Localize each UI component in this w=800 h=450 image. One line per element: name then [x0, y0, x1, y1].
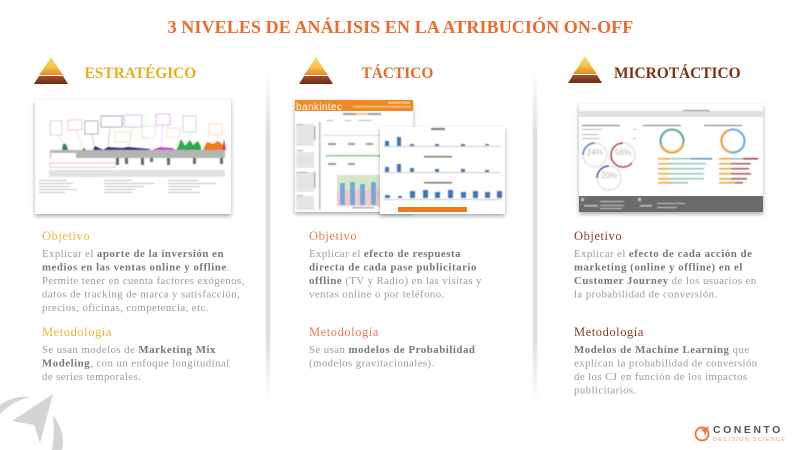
text: metodología microtáctico: Modelos de Machine Learning que — [574, 344, 750, 356]
logo: conento: CONENTO — [713, 424, 783, 436]
text: metodología microtáctico: explican la probabilidad de conversión — [574, 358, 758, 370]
text: objetivo estratégico: Permite tener en cuenta factores exógenos, — [42, 275, 245, 287]
heading: microtáctico: MICROTÁCTICO — [614, 65, 741, 82]
panel: microtáctico — [568, 56, 763, 396]
dashboard image: customer journey: 20% — [601, 171, 617, 180]
text: metodología táctico: Se usan modelos de Probabilidad — [309, 344, 475, 356]
text: metodología microtáctico — [574, 325, 758, 396]
text: metodología táctico: (modelos gravitacionales). — [309, 358, 435, 370]
logo: conento: DECISION SCIENCE — [713, 437, 786, 443]
text: metodología estratégico — [42, 325, 230, 383]
title: 3 NIVELES DE ANÁLISIS EN LA ATRIBUCIÓN ON-OFF — [168, 16, 633, 37]
text: objetivo estratégico: precios, oficinas, competencia, etc. — [42, 302, 209, 314]
text: objetivo táctico — [309, 229, 482, 300]
chart image: marketing mix timeline — [35, 100, 231, 214]
text: objetivo microtáctico: Objetivo — [574, 229, 622, 243]
text: metodología microtáctico: Metodología — [574, 325, 644, 339]
logo: conento — [696, 424, 786, 443]
text: metodología microtáctico: publicitarios. — [574, 384, 637, 396]
dashboard image: customer journey: 24% — [587, 148, 603, 157]
text: objetivo microtáctico: Customer Journey de los usuarios en — [574, 275, 757, 287]
text: objetivo táctico: Explicar el efecto de respuesta — [309, 248, 461, 260]
text: metodología microtáctico: de los CJ en función de los impactos — [574, 371, 748, 383]
icon: pyramid estratégico — [34, 57, 68, 84]
heading: táctico: TÁCTICO — [362, 65, 433, 82]
heading: estratégico: ESTRATÉGICO — [84, 65, 196, 82]
text: objetivo microtáctico — [574, 229, 757, 300]
panel: táctico — [295, 57, 505, 370]
text: metodología estratégico: Modeling, con un enfoque longitudinal — [42, 358, 230, 370]
dashboard image: customer journey: 56% — [615, 148, 631, 157]
text: objetivo microtáctico: la probabilidad de conversión. — [574, 288, 718, 300]
text: objetivo estratégico: Explicar el aporte de la inversión en — [42, 248, 224, 260]
text: objetivo táctico: offline (TV y Radio) en las visitas y — [309, 275, 482, 287]
text: metodología táctico: Metodología — [309, 325, 379, 339]
text: objetivo estratégico: datos de tracking de marca y satisfacción, — [42, 288, 240, 300]
text: objetivo estratégico: Objetivo — [42, 229, 90, 243]
text: objetivo táctico: ventas online o por teléfono. — [309, 288, 445, 300]
dashboard image: bankintec — [295, 100, 505, 214]
text: objetivo estratégico — [42, 229, 245, 314]
text: objetivo microtáctico: marketing (online y offline) en el — [574, 262, 743, 274]
text: metodología estratégico: Se usan modelos de Marketing Mix — [42, 344, 216, 356]
watermark: arrow logo — [0, 394, 63, 450]
dashboard image: bankintec: bankintec — [296, 102, 342, 113]
text: objetivo microtáctico: Explicar el efecto de cada acción de — [574, 248, 752, 260]
icon: pyramid táctico — [299, 57, 333, 84]
dashboard image: customer journey — [579, 104, 763, 212]
text: metodología estratégico: de series temporales. — [42, 371, 141, 383]
text: objetivo táctico: Objetivo — [309, 229, 357, 243]
text: objetivo estratégico: medios en las ventas online y offline. — [42, 262, 230, 274]
panel: estratégico — [34, 57, 245, 383]
text: metodología táctico — [309, 325, 475, 370]
text: objetivo táctico: directa de cada pase publicitario — [309, 262, 477, 274]
icon: pyramid microtáctico — [568, 56, 602, 83]
text: metodología estratégico: Metodología — [42, 325, 112, 339]
